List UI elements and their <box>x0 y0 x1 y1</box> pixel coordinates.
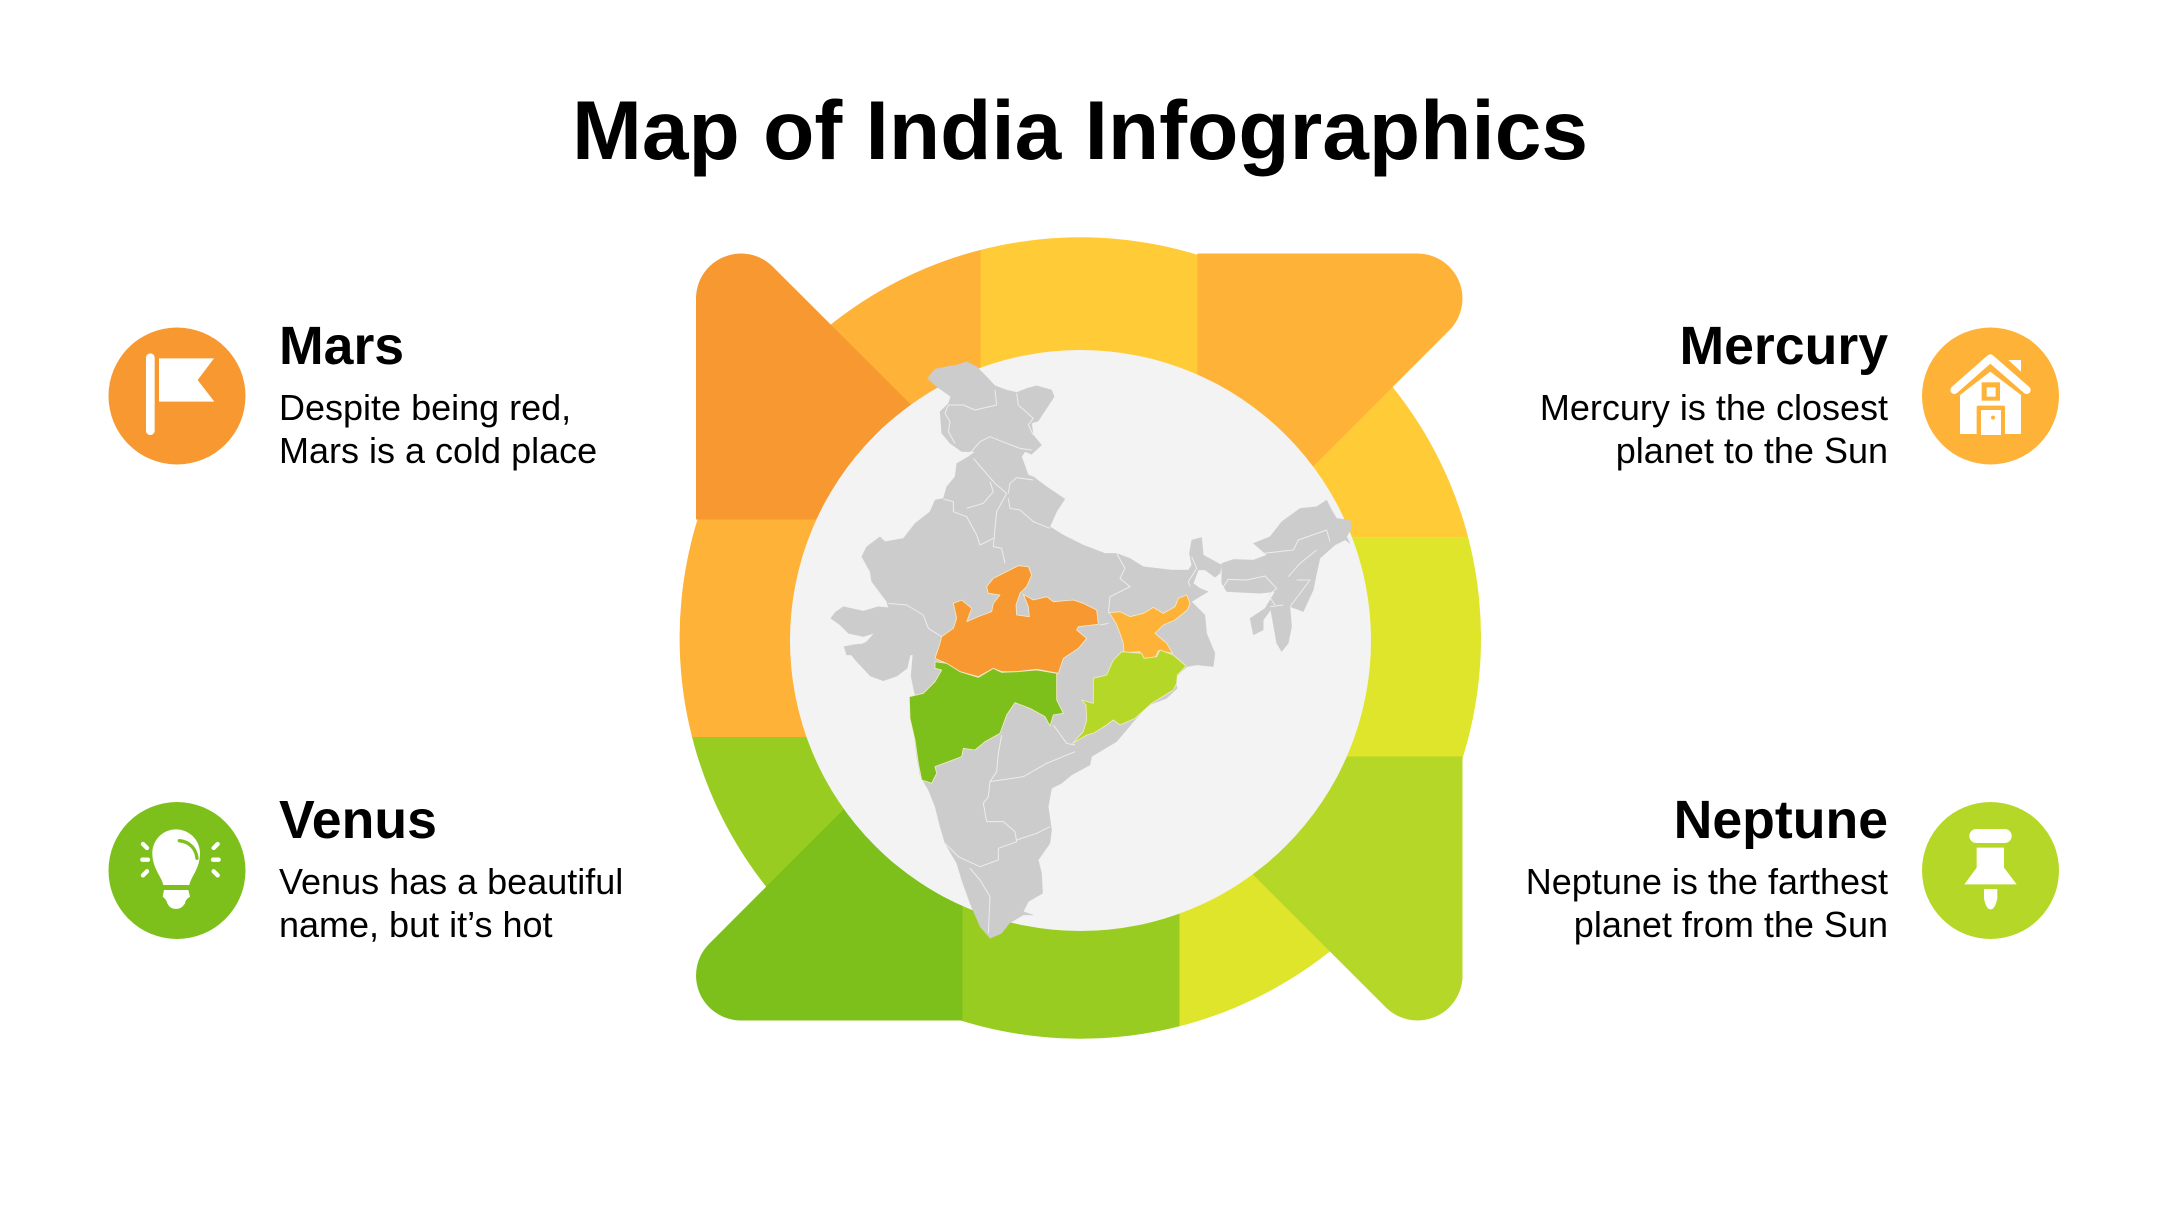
icon: flag <box>108 328 246 464</box>
flag segment: top left <box>696 254 1001 519</box>
ring segments <box>660 220 1500 1050</box>
title: Map of India Infographics <box>572 83 1588 177</box>
flag segment: bottom left <box>696 690 962 1020</box>
state: Madhya Pradesh <box>935 566 1098 677</box>
map: east India <box>1100 537 1222 750</box>
panel: Mercury <box>1540 316 2059 471</box>
map: northeast states <box>1222 500 1352 652</box>
icon: push pin <box>1922 802 2059 939</box>
text: Venus description: name, but it’s hot <box>279 904 552 945</box>
text: Mars description: Mars is a cold place <box>279 430 597 471</box>
inner circle <box>790 350 1371 931</box>
text: Neptune description: planet from the Sun <box>1574 904 1888 945</box>
panel: Mars <box>108 316 597 471</box>
panel: Neptune <box>1526 790 2059 945</box>
icon: house <box>1922 328 2059 464</box>
text: Mars description: Despite being red, <box>279 387 571 428</box>
map: north and central India <box>831 362 1120 655</box>
state: Jharkhand <box>1109 595 1190 658</box>
text: Venus description: Venus has a beautiful <box>279 861 623 902</box>
state: Odisha <box>1073 650 1186 743</box>
map of India <box>831 362 1352 938</box>
state: Maharashtra <box>909 662 1063 783</box>
panel: Venus <box>108 790 623 945</box>
heading: Mars: Mars <box>279 316 404 376</box>
heading: Venus: Venus <box>279 790 437 850</box>
text: Mercury description: planet to the Sun <box>1616 430 1888 471</box>
map: Gujarat coast <box>844 641 941 694</box>
heading: Mercury: Mercury <box>1679 316 1888 376</box>
text: Mercury description: Mercury is the closest <box>1540 387 1888 428</box>
map: south India <box>890 640 1190 938</box>
flag segment: bottom right <box>1150 756 1462 1020</box>
icon: light bulb <box>108 802 246 939</box>
flag segment: top right <box>1198 254 1462 582</box>
text: Neptune description: Neptune is the farthest <box>1526 861 1888 902</box>
central ring diagram <box>660 220 1500 1050</box>
heading: Neptune: Neptune <box>1674 790 1888 850</box>
